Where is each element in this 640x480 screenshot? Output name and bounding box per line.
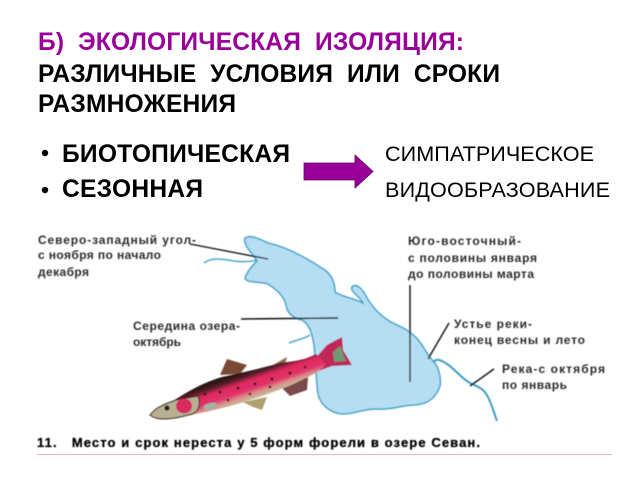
- label: south-east: до половины марта: [408, 267, 534, 281]
- label: river: по январь: [502, 378, 567, 392]
- caption: 11. Место и срок нереста у 5 форм форели в озере Севан.: [37, 435, 480, 450]
- bullet list: [42, 141, 290, 203]
- label: northwest corner: [38, 233, 196, 279]
- label: middle of the lake: октябрь: [133, 335, 181, 349]
- label: south-east: с половины января: [408, 251, 537, 265]
- fish tail: [312, 337, 352, 372]
- fish head: [150, 396, 199, 419]
- heading: purple line: Б) ЭКОЛОГИЧЕСКАЯ ИЗОЛЯЦИЯ:: [38, 29, 464, 56]
- result: second line: ВИДООБРАЗОВАНИЕ: [385, 177, 610, 202]
- bullet: biotopic: БИОТОПИЧЕСКАЯ: [62, 141, 290, 168]
- label: northwest corner: Северо-западный угол-: [38, 233, 196, 247]
- inlet stream northwest: [204, 259, 257, 263]
- bottom rule: [37, 454, 612, 455]
- bullet: seasonal: СЕЗОННАЯ: [62, 176, 203, 203]
- label: river mouth: [454, 317, 585, 347]
- label: middle of the lake: Середина озера-: [133, 319, 240, 333]
- river: [433, 360, 497, 421]
- title: [38, 29, 500, 118]
- label: river mouth: Устье реки-: [454, 317, 532, 331]
- label: south-east: Юго-восточный-: [408, 234, 521, 248]
- fish: [150, 337, 352, 419]
- fish fins: [220, 359, 247, 375]
- label: river: Река-с октября: [502, 362, 605, 376]
- heading: second line: РАЗЛИЧНЫЕ УСЛОВИЯ ИЛИ СРОКИ: [38, 61, 500, 88]
- arrow: [304, 155, 373, 188]
- label: river mouth: конец весны и лето: [454, 333, 585, 347]
- fish spots: [204, 366, 306, 401]
- label: northwest corner: с ноября по начало: [38, 248, 161, 262]
- label: middle of the lake: [133, 319, 240, 349]
- label: river: [502, 362, 605, 392]
- result: first line: СИМПАТРИЧЕСКОЕ: [385, 141, 594, 166]
- fish body: [150, 354, 326, 419]
- label: south-east: [408, 234, 537, 281]
- lake outline: [245, 237, 440, 414]
- pointer lines: [190, 244, 494, 386]
- inlet stream middle: [289, 335, 310, 343]
- heading: third line: РАЗМНОЖЕНИЯ: [38, 91, 236, 118]
- result text: [385, 141, 610, 202]
- label: northwest corner: декабря: [38, 265, 89, 279]
- lake map: [37, 233, 605, 450]
